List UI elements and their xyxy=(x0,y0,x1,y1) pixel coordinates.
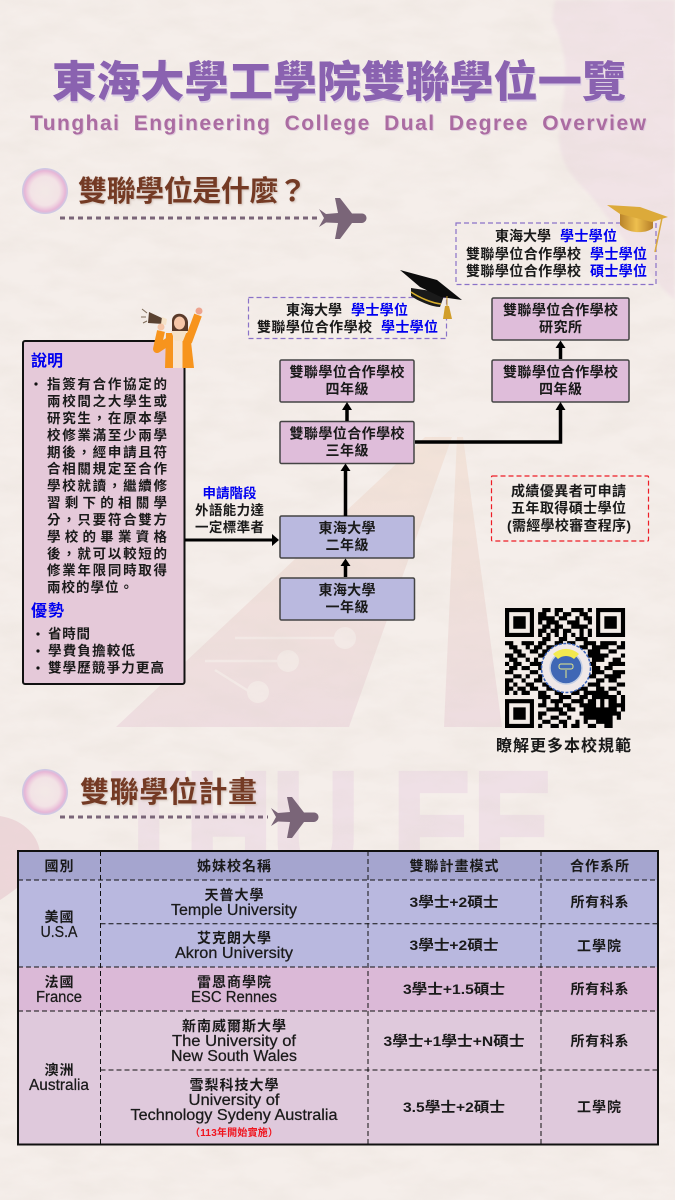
row group: USA: 3學士+2碩士 xyxy=(410,894,498,910)
flow box: partner school year four right: 雙聯學位合作學校 xyxy=(503,364,618,380)
application stage note: 申請階段 xyxy=(202,485,257,501)
heading text: 雙聯學位是什麼？ xyxy=(78,175,307,208)
callout: five-year master xyxy=(492,476,648,541)
icon: bubble xyxy=(22,769,68,815)
flow box: Tunghai year two xyxy=(280,516,414,558)
note: starts in year 113: （113年開始實施） xyxy=(190,1126,278,1139)
icon: bubble xyxy=(22,168,68,214)
flow box: partner school year three xyxy=(280,422,414,464)
row group: Australia: The University of xyxy=(172,1033,297,1050)
application stage note: 外語能力達 xyxy=(195,502,264,518)
row group: USA: 艾克朗大學 xyxy=(197,930,271,946)
explanation text: 研究生，在原本學 xyxy=(47,410,167,426)
row group: Australia: New South Wales xyxy=(171,1048,297,1065)
table header: 國別 xyxy=(44,858,74,874)
icon: plane xyxy=(319,198,366,239)
flow: degree box left: 雙聯學位合作學校 xyxy=(257,319,372,335)
flow box: partner school year four right: 四年級 xyxy=(539,381,582,397)
table header: 合作系所 xyxy=(570,858,629,874)
table: dual degree programs xyxy=(18,851,658,1144)
row group: USA: 美國 xyxy=(44,909,74,925)
flow: degree box right: 雙聯學位合作學校 xyxy=(466,246,581,262)
callout: five-year master: (需經學校審查程序) xyxy=(507,518,631,534)
panel: explanation xyxy=(23,341,184,684)
flow: degree box right: 碩士學位 xyxy=(590,263,647,279)
row group: USA: 所有科系 xyxy=(570,894,628,910)
row group: Australia: 雪梨科技大學 xyxy=(190,1077,278,1093)
flow box: partner school year three: 三年級 xyxy=(326,442,368,458)
subtitle: Tunghai Engineering College Dual Degree Overview xyxy=(30,112,647,135)
row group: USA: Akron University xyxy=(175,945,293,962)
explanation text: 學校的畢業資格 xyxy=(47,528,168,544)
row group: Australia: 所有科系 xyxy=(570,1033,628,1049)
flow box: partner school grad institute xyxy=(492,298,629,340)
flow: degree box left: 學士學位 xyxy=(351,302,408,318)
dotted line xyxy=(60,816,268,818)
flow: degree box left: 東海大學 xyxy=(286,302,342,318)
flow: degree box right: 學士學位 xyxy=(560,228,617,244)
row group: Australia xyxy=(29,1018,628,1139)
callout: five-year master: 五年取得碩士學位 xyxy=(511,500,626,516)
advantages list xyxy=(36,626,164,676)
flow: degree box right: 學士學位 xyxy=(590,246,647,262)
heading: explanation: 說明 xyxy=(31,352,63,370)
flow box: partner school grad institute: 雙聯學位合作學校 xyxy=(503,302,618,318)
application stage note xyxy=(195,485,264,535)
explanation text: 後，就可以較短的 xyxy=(47,546,167,562)
dotted line xyxy=(60,216,318,220)
row group: USA: 3學士+2碩士 xyxy=(410,937,498,953)
heading text: 雙聯學位計畫 xyxy=(80,776,257,809)
row group: USA xyxy=(40,887,628,962)
row group: France: 法國 xyxy=(44,974,74,990)
explanation text xyxy=(34,376,168,595)
row group: USA: Temple University xyxy=(171,902,297,919)
row group: Australia: 新南威爾斯大學 xyxy=(182,1018,286,1034)
flow box: Tunghai year one xyxy=(280,578,414,620)
connector: panel to year two xyxy=(185,534,279,546)
QR code xyxy=(505,610,625,726)
flow: degree box right xyxy=(456,223,656,284)
explanation text: 習剩下的相關學 xyxy=(47,494,167,510)
icon: black graduation cap xyxy=(400,270,462,319)
icon: plane xyxy=(271,797,318,838)
flow: degree box right: 東海大學 xyxy=(495,228,551,244)
title: 東海大學工學院雙聯學位一覽 xyxy=(52,58,626,107)
row group: USA: U.S.A xyxy=(40,924,78,941)
flow box: partner school year four left: 雙聯學位合作學校 xyxy=(290,364,404,380)
section heading: what is dual degree xyxy=(22,168,366,239)
row group: France xyxy=(36,974,628,1006)
row group: Australia: Australia xyxy=(29,1077,89,1094)
explanation text: 兩校的學位。 xyxy=(47,579,133,595)
icon: gold graduation cap xyxy=(607,205,668,252)
table header: 姊妹校名稱 xyxy=(197,858,271,874)
explanation text: 兩校間之大學生或 xyxy=(47,393,168,409)
explanation text: 合相關規定至合作 xyxy=(47,460,168,476)
explanation text: 分，只要符合雙方 xyxy=(47,512,167,528)
flow box: Tunghai year one: 東海大學 xyxy=(318,582,376,598)
application stage note: 一定標準者 xyxy=(195,519,264,535)
icon: university seal xyxy=(542,644,590,692)
flow box: partner school year four left xyxy=(280,360,414,402)
advantages list: 雙學歷競爭力更高 xyxy=(48,660,164,676)
row group: Australia: 工學院 xyxy=(577,1099,621,1115)
section heading: dual degree programs xyxy=(22,769,318,838)
explanation text: 校修業滿至少兩學 xyxy=(47,427,167,443)
arrows between flow boxes xyxy=(340,340,566,577)
table header: 雙聯計畫模式 xyxy=(410,858,498,874)
table row fills xyxy=(18,851,658,1144)
explanation text: 期後，經申請且符 xyxy=(47,444,167,460)
flow box: partner school grad institute: 研究所 xyxy=(539,319,582,335)
row group: Australia: University of xyxy=(188,1092,280,1109)
flow box: partner school year four right xyxy=(492,360,629,402)
flow: degree box left: 學士學位 xyxy=(381,319,438,335)
flow box: Tunghai year one: 一年級 xyxy=(326,599,368,615)
flow box: Tunghai year two: 東海大學 xyxy=(318,520,376,536)
flow: degree box right: 雙聯學位合作學校 xyxy=(466,263,581,279)
flow box: partner school year three: 雙聯學位合作學校 xyxy=(290,426,404,442)
icon: woman with megaphone xyxy=(141,308,202,368)
advantages list: 學費負擔較低 xyxy=(48,642,136,658)
row group: Australia: 3.5學士+2碩士 xyxy=(403,1099,505,1115)
row group: Australia: 3學士+1學士+N碩士 xyxy=(384,1033,524,1049)
row group: Australia: 澳洲 xyxy=(44,1062,74,1078)
flow box: Tunghai year two: 二年級 xyxy=(326,537,368,553)
row group: France: 3學士+1.5碩士 xyxy=(403,981,505,997)
advantages list: 省時間 xyxy=(48,626,90,642)
row group: France: France xyxy=(36,989,82,1006)
explanation text: 指簽有合作協定的 xyxy=(47,376,167,392)
row group: USA: 天普大學 xyxy=(204,887,264,903)
row group: USA: 工學院 xyxy=(577,938,621,954)
row group: France: 所有科系 xyxy=(570,981,628,997)
row group: Australia: Technology Sydeny Australia xyxy=(130,1107,338,1124)
flow box: partner school year four left: 四年級 xyxy=(326,381,368,397)
QR caption: 瞭解更多本校規範 xyxy=(496,736,631,755)
table header xyxy=(44,858,629,874)
background: THU EE xyxy=(112,740,553,913)
flow: degree box left xyxy=(248,298,446,338)
row group: France: 雷恩商學院 xyxy=(197,974,271,990)
heading: advantages: 優勢 xyxy=(31,602,64,620)
callout: five-year master: 成績優異者可申請 xyxy=(511,483,626,499)
explanation text: 修業年限同時取得 xyxy=(47,562,167,578)
row group: France: ESC Rennes xyxy=(191,989,277,1006)
explanation text: 學校就讀，繼續修 xyxy=(47,478,168,494)
